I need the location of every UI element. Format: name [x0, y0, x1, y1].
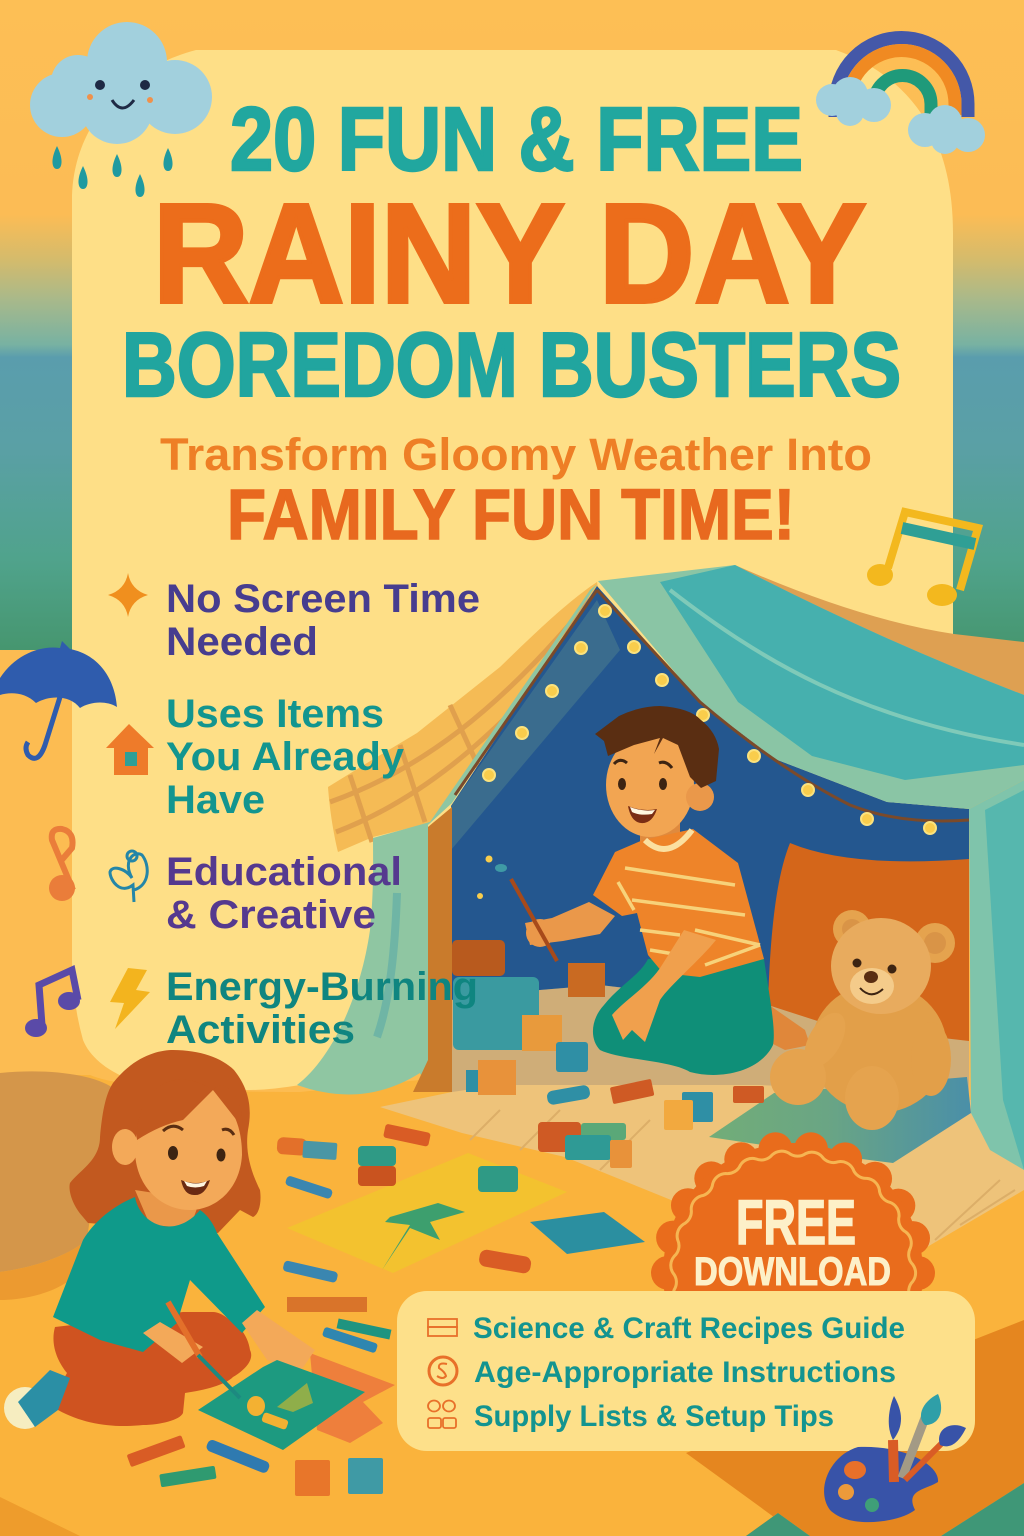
head — [606, 733, 694, 837]
right hand — [143, 1322, 203, 1363]
face — [614, 760, 672, 823]
ear — [112, 1129, 138, 1165]
hair — [595, 706, 719, 788]
feature: energy burning — [110, 965, 478, 1052]
badge: free download: FREE — [736, 1188, 856, 1258]
teal drape top — [598, 565, 1024, 809]
icon: blue umbrella — [0, 641, 117, 758]
panel: download contents — [397, 1291, 975, 1451]
feature: educational: & Creative — [166, 893, 376, 937]
back foot — [762, 1000, 810, 1050]
girl face — [163, 1126, 234, 1195]
row: age appropriate: Age-Appropriate Instructions — [474, 1356, 896, 1389]
feature: uses items — [106, 692, 405, 822]
green paper — [198, 1360, 365, 1450]
hair — [70, 1050, 261, 1233]
feature: uses items: Have — [166, 778, 265, 822]
icon: yellow music notes — [867, 512, 978, 606]
feature: uses items: You Already — [166, 735, 405, 779]
feature: uses items: Uses Items — [166, 692, 384, 736]
blanket fort — [297, 565, 1024, 1170]
feature: energy burning: Activities — [166, 1008, 355, 1052]
feature: no screen time — [108, 573, 480, 664]
tan blanket behind — [735, 565, 1024, 700]
shoe — [4, 1370, 70, 1429]
icon: orange music note — [49, 829, 75, 901]
badge: free download — [663, 1143, 923, 1403]
icon: books — [428, 1319, 457, 1336]
subtitle: Transform Gloomy Weather Into — [160, 429, 872, 480]
fringe — [137, 1080, 242, 1140]
background: rainy window bands — [0, 0, 1024, 650]
craft paper and supplies on the floor — [127, 1124, 645, 1496]
icon: age circle — [429, 1357, 457, 1385]
teddy bear — [770, 910, 955, 1130]
left light-green drape — [297, 584, 597, 1094]
floor — [0, 1071, 1024, 1536]
girl — [4, 1050, 365, 1450]
feature: educational: Educational — [166, 850, 402, 894]
pants — [53, 1312, 251, 1426]
icon: supplies — [428, 1400, 456, 1428]
wood post — [413, 807, 452, 1092]
left hand — [242, 1310, 315, 1372]
pants — [593, 959, 774, 1075]
title — [122, 90, 901, 416]
row: science and craft: Science & Craft Recipes Guide — [473, 1312, 905, 1345]
collar — [645, 830, 692, 849]
paint brush — [511, 879, 557, 961]
string lights — [455, 590, 969, 834]
title line 2: RAINY DAY — [153, 174, 866, 332]
feature list — [106, 573, 480, 1052]
neck — [135, 1190, 200, 1228]
sweater — [53, 1197, 265, 1352]
row: supply lists: Supply Lists & Setup Tips — [474, 1400, 834, 1433]
boy — [511, 706, 810, 1075]
badge: free download: DOWNLOAD — [694, 1250, 891, 1294]
subtitle: FAMILY FUN TIME! — [227, 476, 795, 555]
right curtain — [969, 780, 1024, 1170]
icon: smiling rain cloud — [30, 22, 212, 197]
title line 1: 20 FUN & FREE — [230, 90, 803, 190]
brush — [168, 1302, 200, 1357]
icon: purple music note — [25, 970, 80, 1037]
striped shirt — [593, 829, 764, 977]
panel: cream title background — [72, 50, 953, 1090]
fort interior — [451, 586, 969, 1040]
icon: rainbow with clouds — [816, 38, 985, 154]
icon: paint palette and brushes — [824, 1394, 966, 1522]
feature: educational — [110, 850, 402, 937]
neck — [640, 815, 680, 850]
left arm — [525, 902, 615, 945]
rug under the fort — [380, 985, 1024, 1250]
plaid blanket — [328, 582, 600, 852]
paint dabs — [477, 856, 507, 899]
subtitle — [160, 429, 872, 555]
paper shapes — [247, 1383, 313, 1430]
building blocks in the fort — [452, 940, 764, 1168]
head — [135, 1090, 242, 1210]
mat under bear — [709, 1077, 971, 1163]
feature: no screen time: Needed — [166, 620, 318, 664]
feature: energy burning: Energy-Burning — [166, 965, 478, 1009]
right arm — [612, 930, 716, 1042]
bean bag — [0, 1071, 113, 1272]
ear — [686, 783, 714, 811]
feature: no screen time: No Screen Time — [166, 577, 480, 621]
pillow — [768, 843, 969, 1041]
